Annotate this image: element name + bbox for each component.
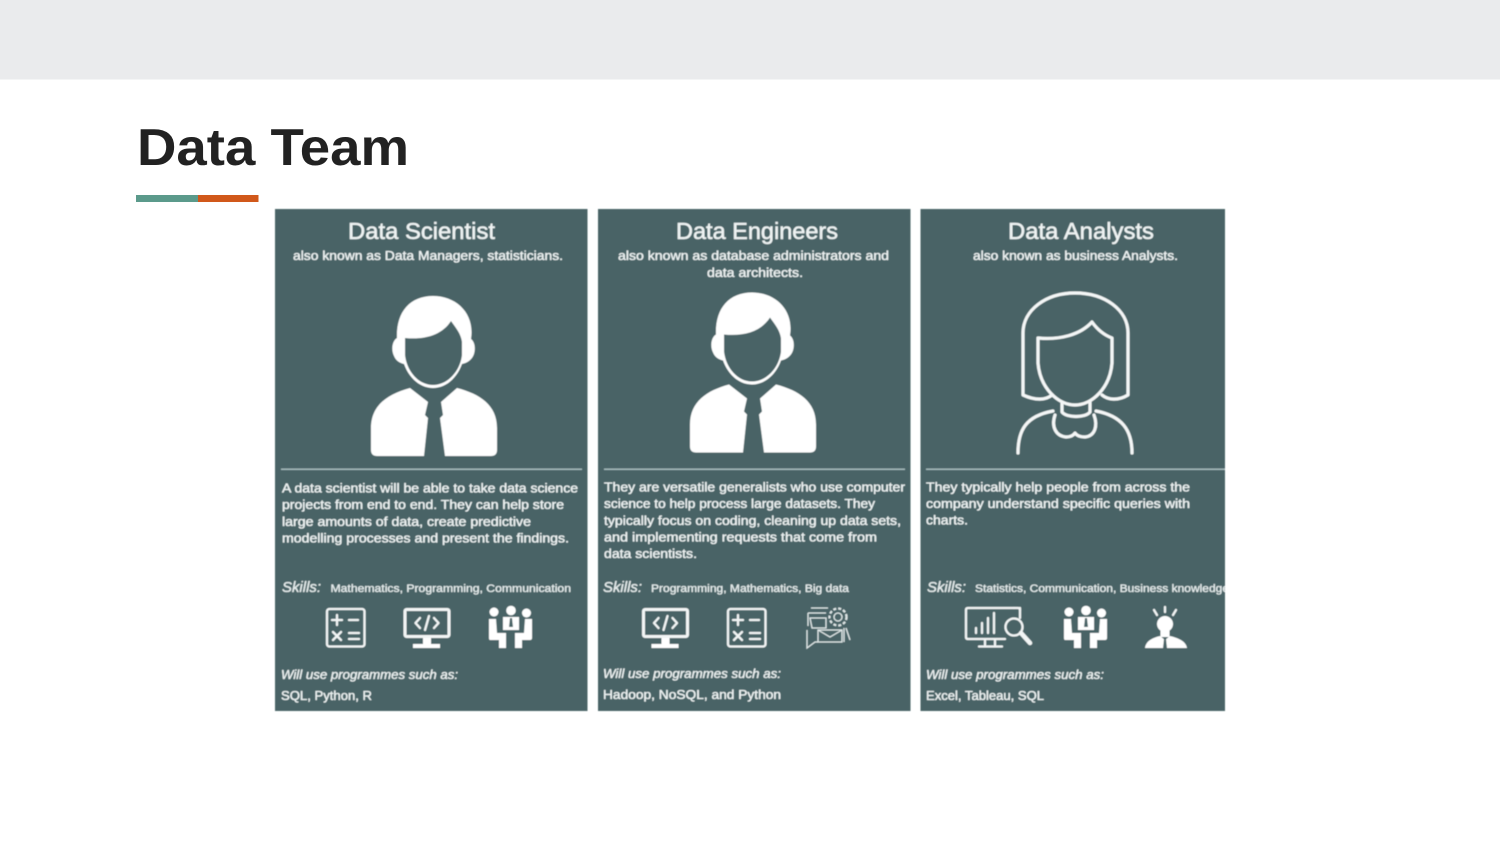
skills xyxy=(927,579,1229,596)
icon: analytics monitor xyxy=(966,608,1030,646)
icon: big data xyxy=(807,608,850,648)
icon: team meeting xyxy=(1064,606,1107,648)
icon: female person xyxy=(1018,293,1132,453)
programmes: Will use programmes such as: xyxy=(926,667,1104,682)
panel: data analysts xyxy=(920,209,1229,711)
programmes: Will use programmes such as: xyxy=(281,667,458,682)
description xyxy=(926,480,1190,528)
description: and implementing requests that come from xyxy=(604,530,877,544)
programmes: Will use programmes such as: xyxy=(603,666,781,681)
heading: Data Scientist xyxy=(348,218,496,244)
subtitle: data architects. xyxy=(707,265,803,280)
divider xyxy=(281,468,582,470)
icon: team meeting xyxy=(489,606,532,648)
icon: idea person xyxy=(1145,607,1187,648)
subtitle: also known as Data Managers, statisticians. xyxy=(293,248,563,263)
skills xyxy=(603,579,850,596)
divider xyxy=(926,468,1225,470)
programmes xyxy=(281,667,458,703)
description: A data scientist will be able to take data science xyxy=(282,480,578,496)
top header band xyxy=(0,0,1500,80)
icon: code monitor xyxy=(644,610,688,648)
divider xyxy=(604,468,905,470)
skills: Skills: xyxy=(927,579,966,596)
icon: calculator xyxy=(327,609,364,646)
description: large amounts of data, create predictive xyxy=(282,514,531,529)
programmes: SQL, Python, R xyxy=(281,688,372,703)
title accent bar xyxy=(136,195,258,202)
skills: Skills: xyxy=(603,579,642,596)
description: projects from end to end. They can help store xyxy=(282,497,564,512)
skills: Skills: xyxy=(282,579,321,596)
icon: male person xyxy=(371,296,497,456)
skills: Statistics, Communication, Business knowledge xyxy=(975,583,1229,595)
description xyxy=(604,480,906,561)
icon: code monitor xyxy=(405,610,449,648)
icon: male person xyxy=(690,292,816,452)
heading: Data Engineers xyxy=(676,218,838,244)
programmes: Excel, Tableau, SQL xyxy=(926,688,1044,703)
description xyxy=(282,480,578,546)
description: They typically help people from across the xyxy=(926,480,1190,494)
programmes xyxy=(603,666,781,702)
title: Data Team xyxy=(137,119,409,177)
description: They are versatile generalists who use computer xyxy=(604,480,906,494)
heading: Data Analysts xyxy=(1008,218,1154,244)
description: science to help process large datasets. They xyxy=(604,496,876,511)
subtitle xyxy=(618,248,889,280)
skills xyxy=(282,579,571,596)
skills: Programming, Mathematics, Big data xyxy=(651,583,850,595)
panel: data scientist xyxy=(275,209,588,711)
description: data scientists. xyxy=(604,546,697,561)
description: charts. xyxy=(926,512,968,528)
description: typically focus on coding, cleaning up data sets, xyxy=(604,513,901,528)
programmes xyxy=(926,667,1104,703)
subtitle: also known as business Analysts. xyxy=(973,248,1178,263)
skills: Mathematics, Programming, Communication xyxy=(330,583,571,595)
icon: calculator xyxy=(728,609,766,646)
programmes: Hadoop, NoSQL, and Python xyxy=(603,687,781,702)
description: modelling processes and present the findings. xyxy=(282,530,569,546)
subtitle: also known as database administrators and xyxy=(618,248,889,263)
panel: data engineers xyxy=(598,209,910,711)
description: company understand specific queries with xyxy=(926,496,1190,511)
